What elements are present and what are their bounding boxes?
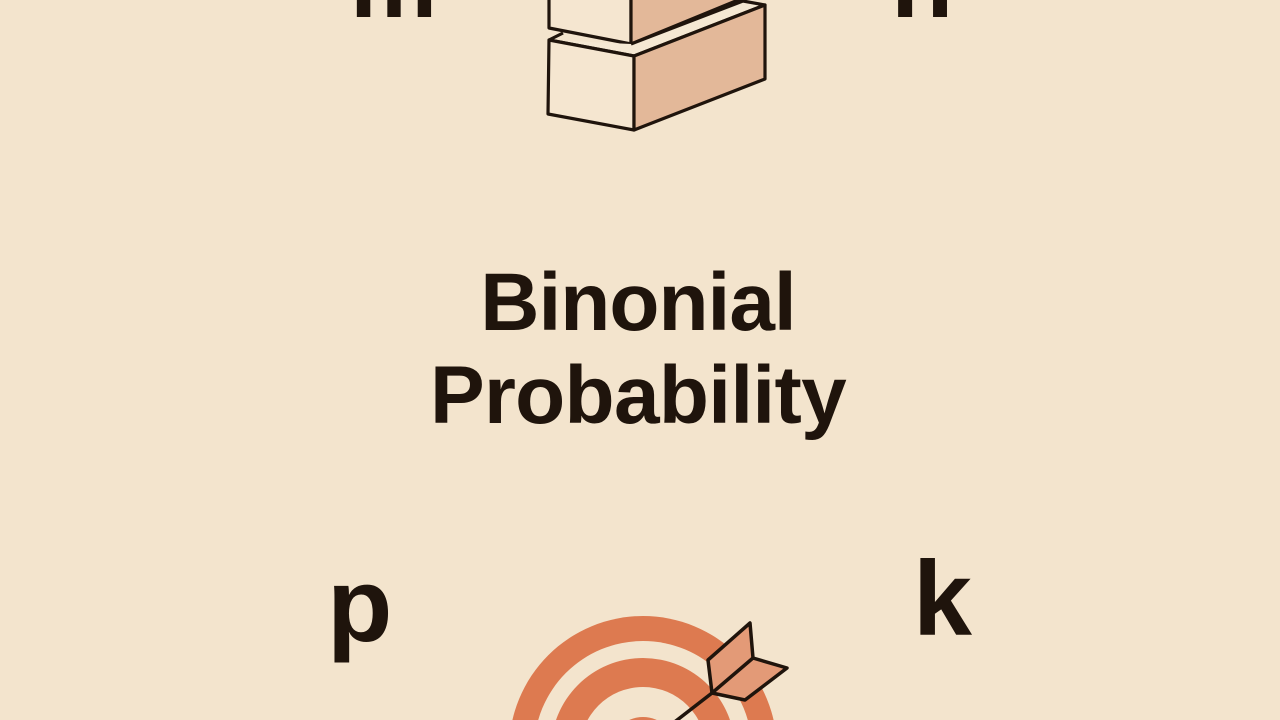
title bbox=[430, 257, 846, 441]
letter k: k bbox=[913, 540, 972, 658]
title: Probability bbox=[430, 350, 846, 441]
letter p: p bbox=[327, 548, 392, 664]
title: Binonial bbox=[480, 257, 796, 348]
